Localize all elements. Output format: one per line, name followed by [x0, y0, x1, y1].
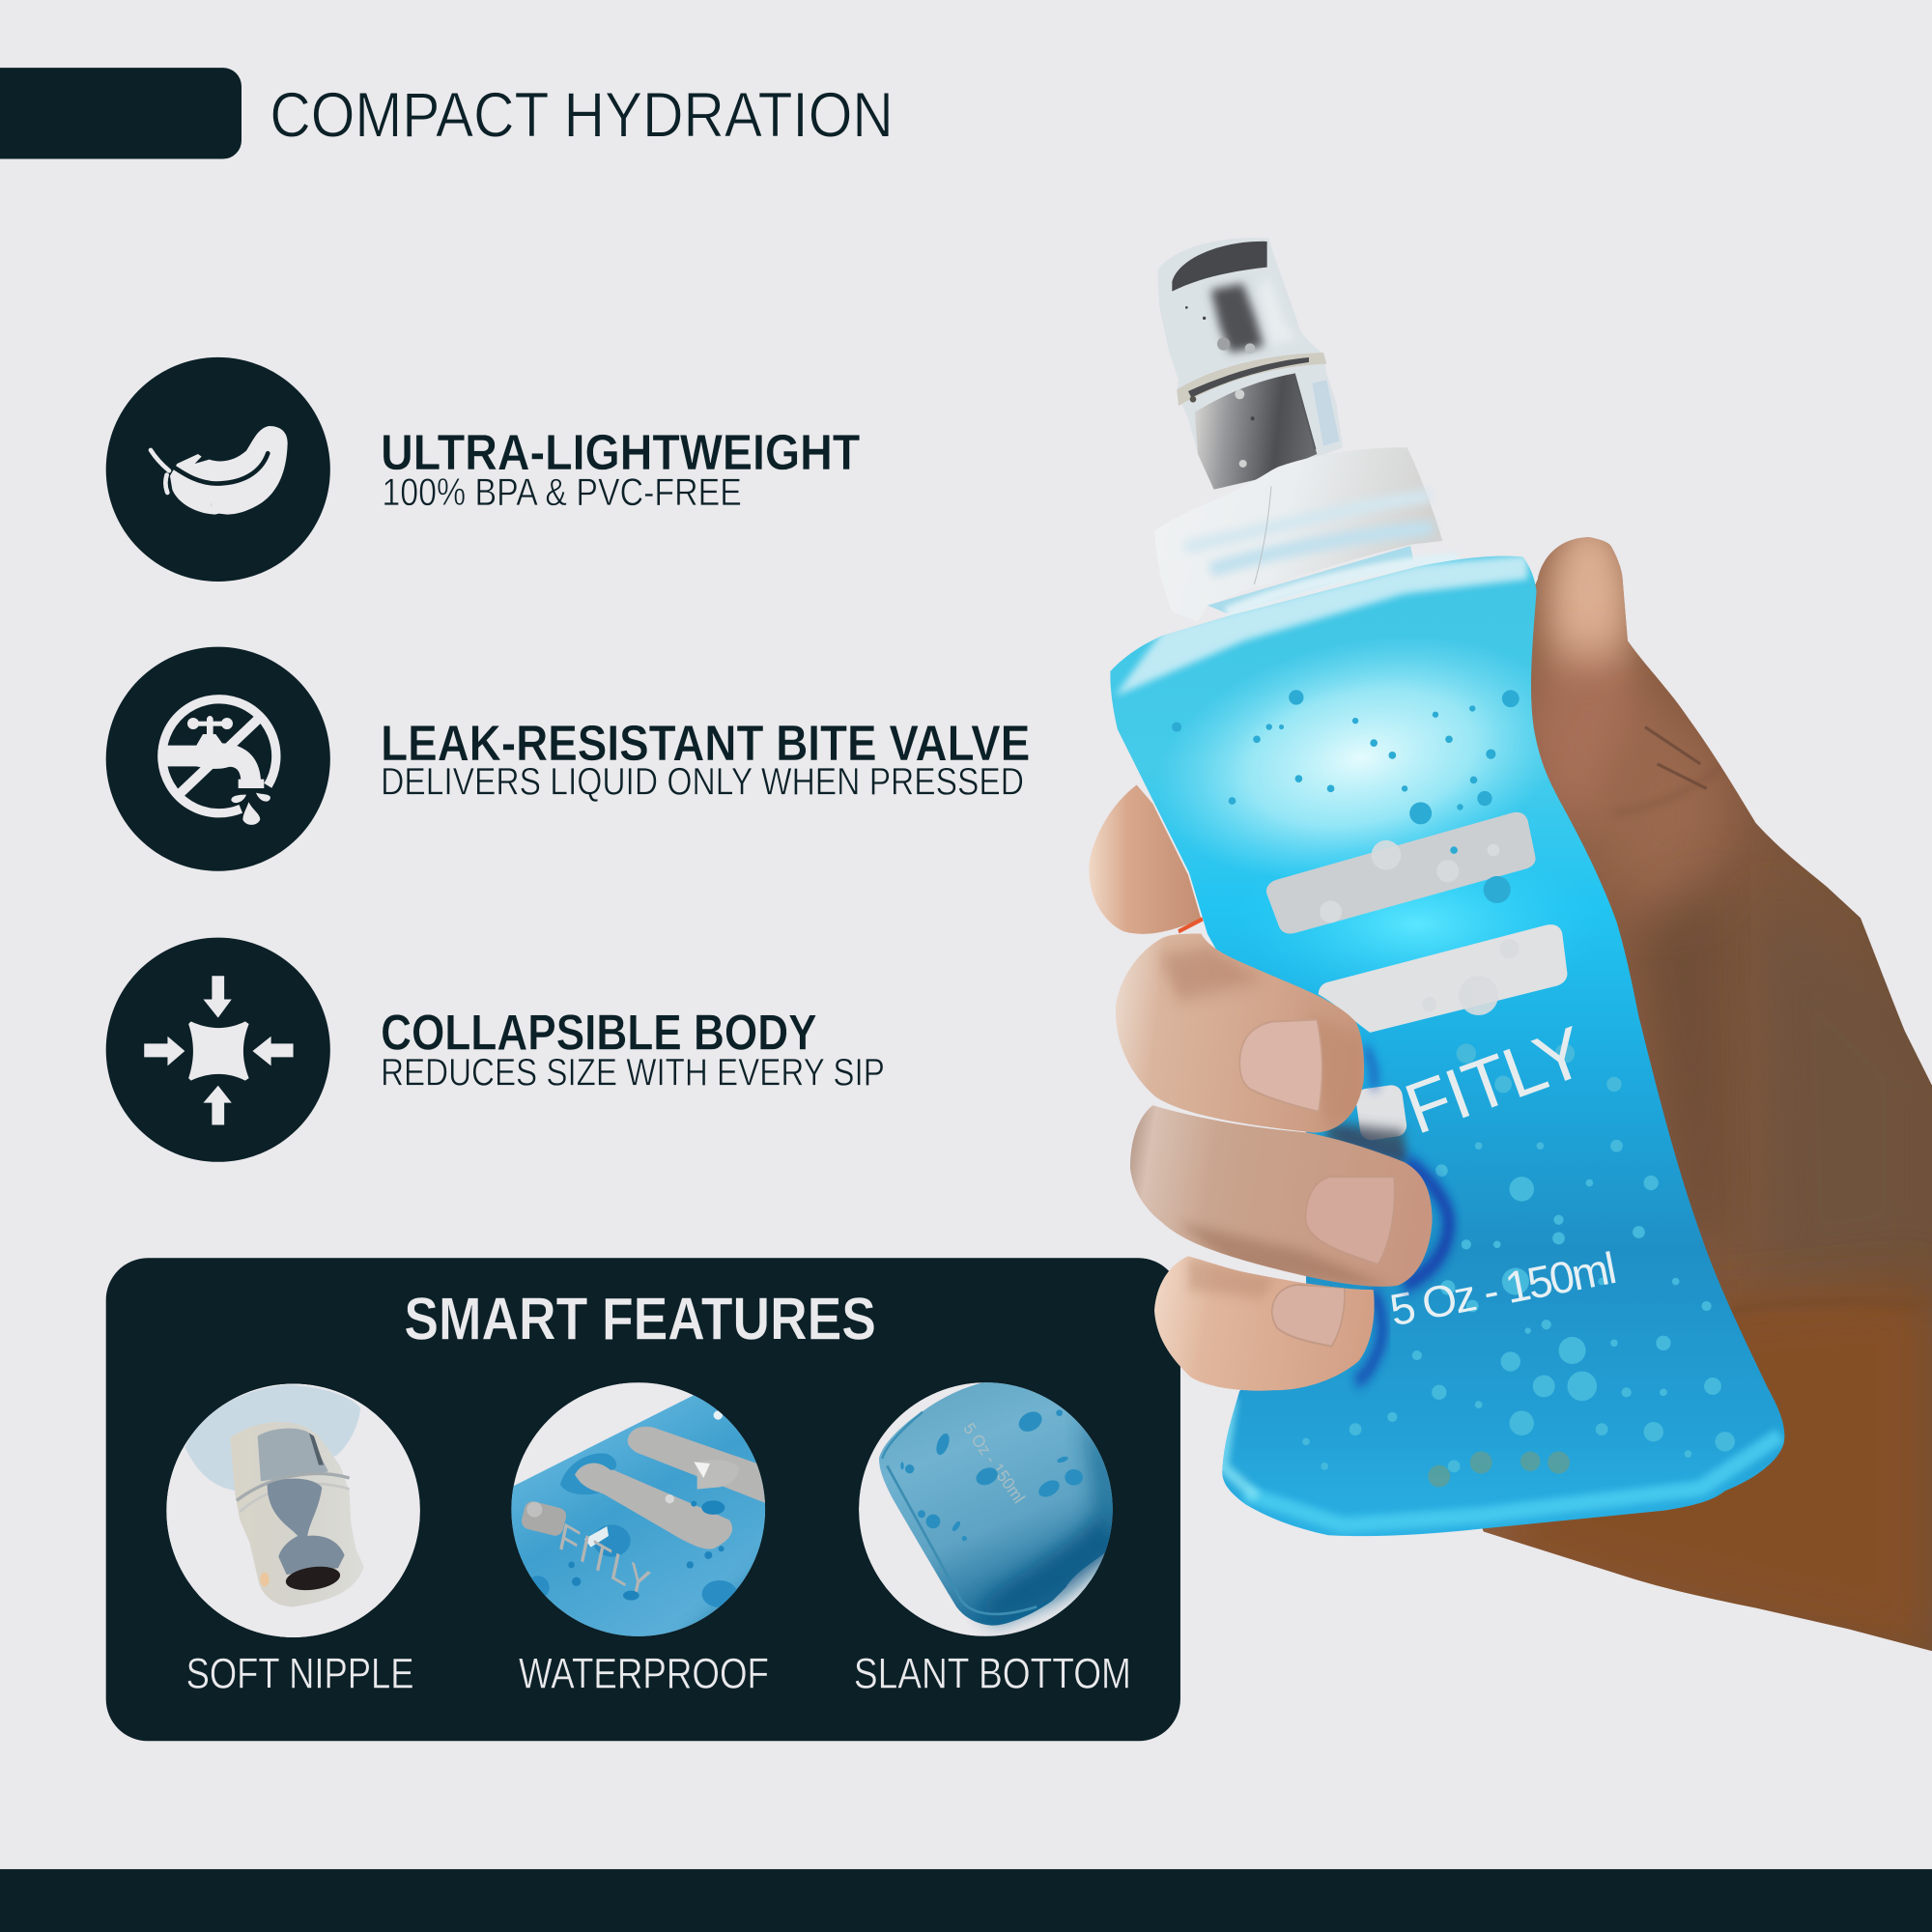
icon: compress arrows	[106, 938, 330, 1162]
feature: collapsible body	[106, 938, 885, 1162]
label: soft nipple: SOFT NIPPLE	[186, 1650, 414, 1697]
photo: soft nipple	[166, 1383, 420, 1637]
heading: COLLAPSIBLE BODY	[381, 1006, 817, 1062]
header tab	[0, 68, 242, 159]
panel heading: SMART FEATURES	[404, 1285, 876, 1352]
finger: middle	[1111, 929, 1369, 1139]
icon: no-drip tap	[162, 699, 276, 826]
stripe: lower	[1319, 924, 1567, 1033]
logo: fitly: FITLY	[1395, 1010, 1596, 1150]
icon circle: feather	[106, 357, 330, 582]
finger: ring	[1127, 1101, 1436, 1290]
feature: leak-resistant valve	[106, 647, 1030, 871]
bottle	[1084, 238, 1824, 1552]
icon: feather	[151, 426, 288, 515]
hand: palm and thumb	[1482, 537, 1932, 1651]
bottom bar	[0, 1869, 1932, 1932]
stripe: upper	[1266, 812, 1536, 934]
finger: index tip	[1089, 785, 1201, 934]
collar	[1154, 447, 1459, 621]
nozzle	[1157, 238, 1343, 490]
photo: slant bottom: 5 Oz - 150ml	[959, 1419, 1029, 1507]
subheading: 100% BPA & PVC-FREE	[382, 471, 742, 514]
panel: smart features	[106, 1258, 1180, 1741]
subheading: REDUCES SIZE WITH EVERY SIP	[381, 1052, 885, 1094]
subheading: DELIVERS LIQUID ONLY WHEN PRESSED	[381, 761, 1024, 804]
fingers over bottle	[1111, 919, 1449, 1395]
bottle body	[1110, 556, 1785, 1536]
finger: little	[1151, 1252, 1377, 1395]
heading: ULTRA-LIGHTWEIGHT	[381, 425, 860, 481]
photo: waterproof: FITLY	[555, 1515, 653, 1607]
photo: waterproof	[511, 1382, 765, 1636]
photo: hand holding bottle	[1084, 238, 1932, 1663]
label: capacity: 5 Oz - 150ml	[1386, 1242, 1620, 1335]
photo: slant bottom	[859, 1381, 1123, 1636]
feature: ultra-lightweight	[106, 357, 860, 582]
title: COMPACT HYDRATION	[270, 80, 894, 152]
droplets	[1172, 690, 1735, 1488]
heading: LEAK-RESISTANT BITE VALVE	[381, 716, 1030, 772]
label: slant bottom: SLANT BOTTOM	[854, 1650, 1131, 1697]
label: waterproof: WATERPROOF	[519, 1650, 769, 1697]
icon circle: tap	[106, 647, 330, 871]
